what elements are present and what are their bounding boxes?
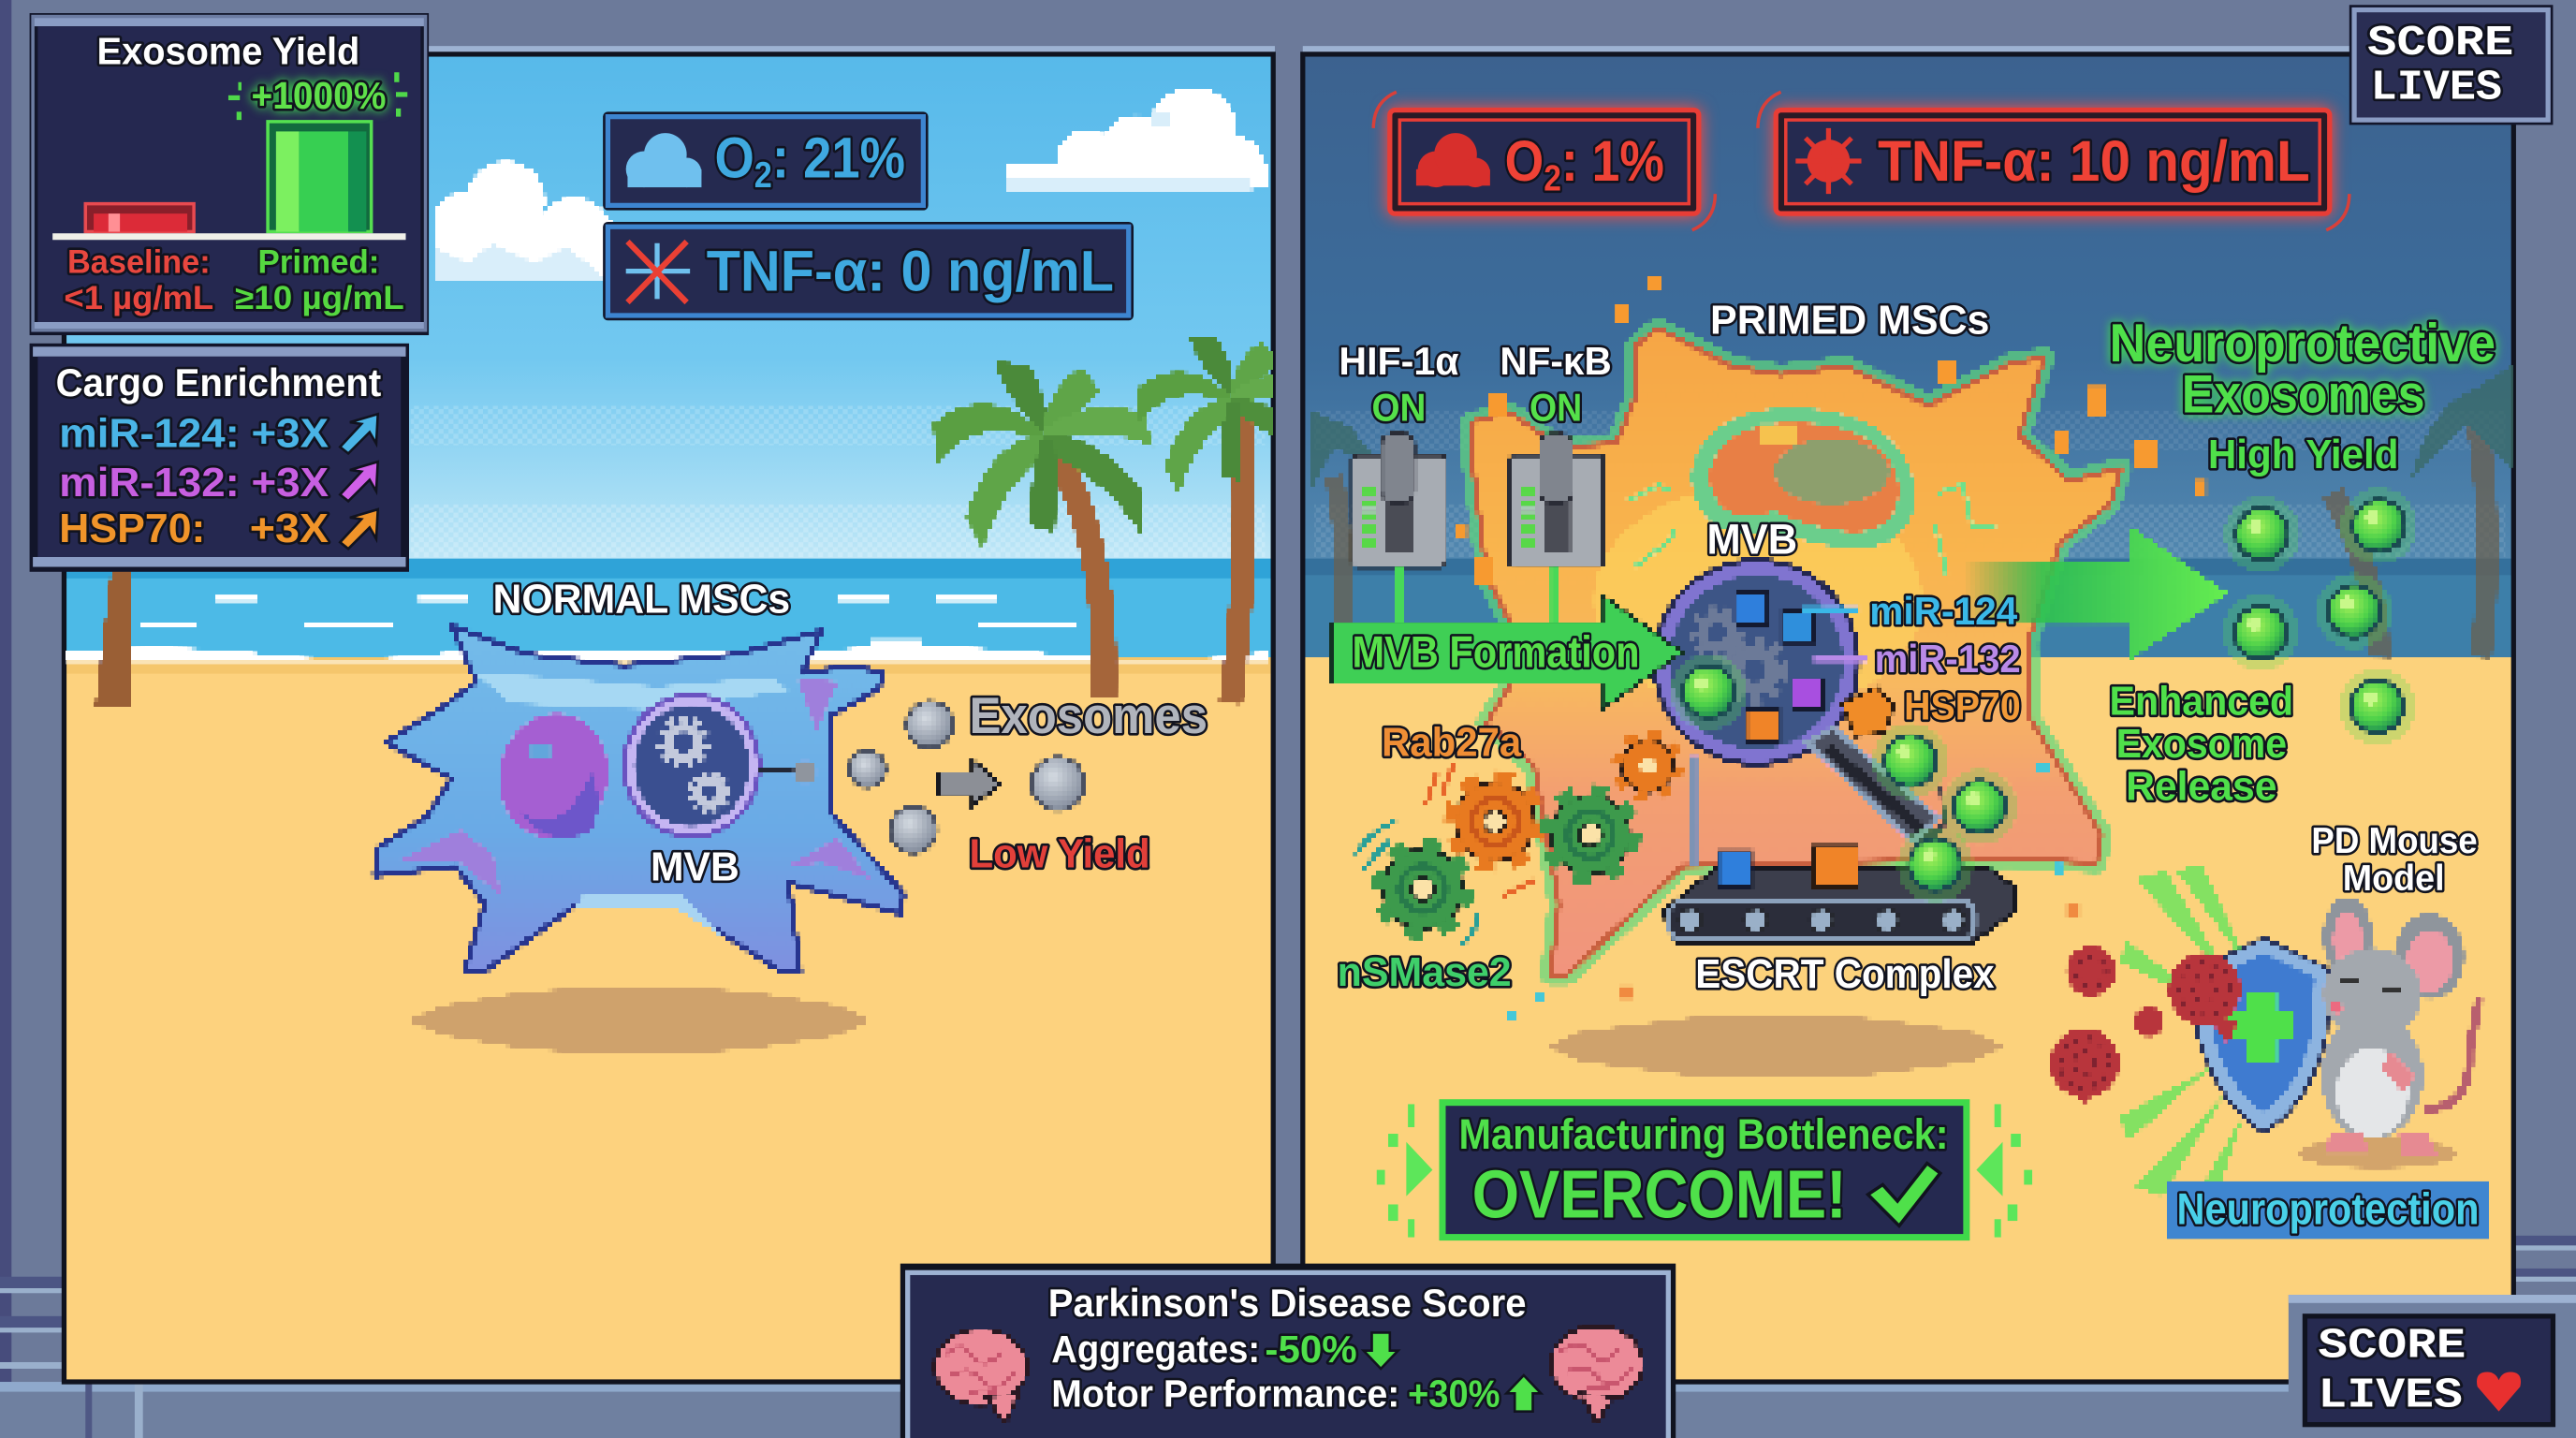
alpha-synuclein aggregates (2050, 946, 2241, 1104)
labels: primed scene: HSP70 (1904, 684, 2021, 728)
bar: baseline (85, 204, 194, 231)
dark sky (1303, 54, 2513, 560)
heading: neuroprotective exosomes: Exosomes (2182, 365, 2425, 425)
heading: neuroprotective exosomes (2110, 314, 2496, 477)
warm sand (1303, 657, 2513, 1382)
gears (1355, 735, 1679, 945)
label: neuroprotection: Neuroprotection (2177, 1185, 2479, 1235)
panel: cargo enrichment (30, 344, 409, 572)
arrow: enhanced release (1963, 526, 2228, 661)
labels: normal scene: NORMAL MSCs (493, 577, 790, 623)
labels: primed scene: PD Mouse (2311, 821, 2478, 861)
hud: score lives top (2349, 5, 2553, 125)
hud: score lives top: LIVES (2371, 63, 2502, 111)
status: O2 primed: O (1505, 129, 1549, 194)
labels: primed scene: ON (1372, 385, 1426, 429)
sparkles (228, 72, 407, 120)
panel: normal conditions background (64, 54, 1273, 1382)
value: +1000% (252, 74, 386, 117)
labels: primed scene: nSMase2 (1338, 949, 1512, 995)
labels: normal scene: Exosomes (970, 687, 1208, 744)
toggle lines (1395, 567, 1559, 626)
status: O2 normal: : 21% (772, 126, 905, 191)
sand (64, 657, 1273, 1382)
labels: primed scene (1338, 297, 2478, 997)
sky (64, 54, 1273, 560)
label: enhanced exosome release: Release (2126, 764, 2277, 810)
clouds and palms: normal scene (66, 87, 1324, 707)
labels: ≥10 µg/mL (235, 280, 404, 316)
score text: Aggregates: (1051, 1328, 1260, 1371)
hud: score lives bottom (2289, 1295, 2576, 1438)
score text: +30% (1408, 1372, 1500, 1415)
labels: primed scene: Rab27a (1382, 719, 1522, 765)
status: O2 primed: 2 (1544, 159, 1561, 199)
heading: neuroprotective exosomes: Neuroprotective (2110, 314, 2496, 374)
exosomes: high yield (2223, 488, 2417, 744)
labels (64, 243, 404, 316)
nucleus (1690, 407, 1915, 549)
labels: primed scene: PRIMED MSCs (1710, 297, 1989, 343)
labels: primed scene: ESCRT Complex (1695, 951, 1995, 997)
status: O2 primed (1373, 92, 1715, 230)
row: HSP70: +3X (250, 506, 329, 551)
labels: primed scene: NF-κB (1500, 339, 1612, 383)
green rays behind shield (2119, 864, 2250, 1232)
sparks (1454, 276, 2206, 585)
panel: primed conditions background (1303, 54, 2513, 1382)
cell shadow: normal (407, 990, 871, 1051)
callout: bottleneck overcome: OVERCOME! (1472, 1158, 1847, 1233)
toggle: NF-kB (1510, 433, 1603, 567)
mouse (2298, 897, 2479, 1168)
labels: primed scene: MVB (1707, 515, 1797, 563)
panel: Parkinson's disease score (900, 1264, 1676, 1438)
score text: Parkinson's Disease Score (1048, 1281, 1526, 1325)
label: enhanced exosome release: Exosome (2116, 721, 2287, 767)
labels: normal scene: MVB (651, 844, 739, 890)
brain icons (935, 1326, 1643, 1423)
icon: blocked TNF (626, 242, 690, 302)
palms: primed scene (1310, 365, 2513, 657)
normal MSC cell (374, 626, 903, 971)
callout: bottleneck overcome: Manufacturing Bottleneck: (1459, 1110, 1949, 1158)
labels: primed scene: MVB Formation (1352, 628, 1640, 678)
MVB: normal (624, 695, 759, 836)
score text: -50% (1265, 1328, 1357, 1371)
hud: score lives top: SCORE (2367, 19, 2513, 67)
sparkles (1377, 1104, 2032, 1238)
row: HSP70 (59, 506, 378, 551)
labels: primed scene: Model (2343, 858, 2445, 899)
ESCRT conveyor (1662, 723, 2017, 943)
row: miR-132: miR-132: +3X (59, 460, 329, 506)
exosomes: normal (848, 700, 1086, 855)
icon: check (1868, 1164, 1940, 1225)
labels: primed scene: miR-124 (1869, 589, 2018, 633)
shadow: primed cell (1547, 1016, 2004, 1078)
row: HSP70: HSP70: (59, 506, 205, 551)
status: O2 normal: 2 (754, 155, 772, 196)
score text: Motor Performance: (1051, 1372, 1399, 1415)
labels: <1 µg/mL (64, 280, 213, 316)
callout: bottleneck overcome (1377, 1103, 2032, 1238)
score text (1048, 1281, 1541, 1415)
hud: score lives bottom: LIVES (2318, 1371, 2463, 1419)
toggle: HIF-1a (1352, 433, 1445, 567)
MVB: primed (1654, 560, 1895, 764)
status: O2 primed: : 1% (1561, 129, 1664, 194)
heading: Cargo Enrichment (56, 360, 381, 404)
heading: neuroprotective exosomes: High Yield (2208, 432, 2398, 477)
arrow: low yield output (938, 761, 1001, 805)
icon: red virus (1795, 128, 1862, 194)
panel: exosome yield (30, 13, 429, 335)
labels: Primed: (258, 243, 379, 280)
labels: primed scene: miR-132 (1875, 637, 2021, 681)
icon: cloud (626, 133, 701, 187)
status: TNF primed: TNF-α: 10 ng/mL (1878, 129, 2310, 194)
bar: primed (268, 122, 372, 231)
shield (2198, 938, 2330, 1132)
labels: Baseline: (67, 243, 211, 280)
icon: heart (2477, 1372, 2521, 1412)
row: miR-124: miR-124: +3X (59, 410, 329, 456)
status: TNF normal: TNF-α: 0 ng/mL (707, 240, 1114, 304)
sea (64, 559, 1273, 661)
status: O2 normal (603, 111, 929, 211)
label: enhanced exosome release (2110, 678, 2293, 810)
heading: Exosome Yield (97, 29, 359, 72)
hud: score lives bottom: SCORE (2318, 1322, 2466, 1371)
arrow: MVB formation (1331, 594, 1682, 710)
primed MSC cell (1454, 276, 2206, 1022)
labels: normal scene: Low Yield (970, 831, 1150, 877)
status: TNF normal (603, 222, 1134, 320)
dark sea (1303, 559, 2513, 661)
status: TNF primed (1758, 92, 2349, 230)
labels: normal scene (493, 577, 1208, 890)
status: O2 normal: O (714, 126, 759, 191)
labels: primed scene: ON (1530, 385, 1582, 429)
icon: red cloud (1416, 133, 1490, 187)
label: enhanced exosome release: Enhanced (2110, 678, 2293, 724)
labels: primed scene: HIF-1α (1339, 339, 1459, 383)
